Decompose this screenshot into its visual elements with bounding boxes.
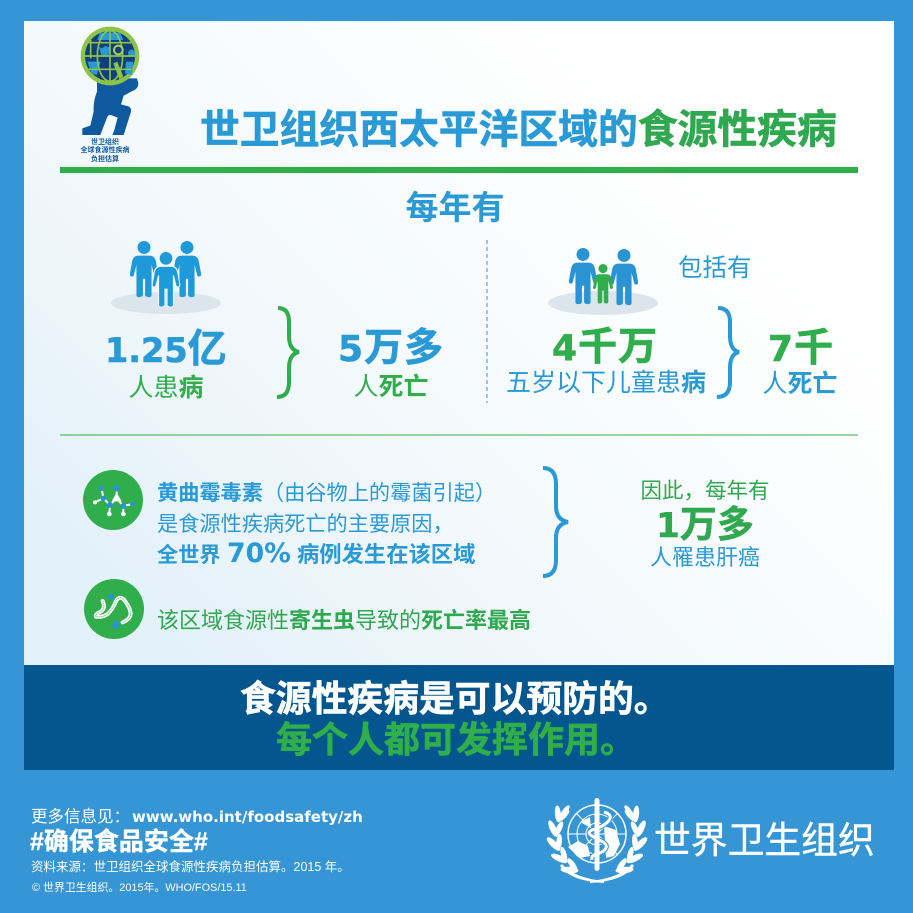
footer text: 资料来源：世卫组织全球食源性疾病负担估算。2015 年。 — [31, 859, 350, 874]
text: aflatoxin: 病例发生在该区域 — [297, 542, 475, 567]
text: aflatoxin — [157, 481, 496, 569]
panel: children — [506, 248, 838, 398]
text: liver cancer: 因此，每年有 — [640, 479, 770, 503]
label: deaths: 人死亡 — [353, 373, 429, 401]
brace: large blue — [543, 468, 568, 576]
logo caption — [80, 137, 130, 163]
stat: 50 thousand: 5万多 — [338, 327, 444, 370]
text: aflatoxin: 黄曲霉毒素（由谷物上的霉菌引起） — [157, 481, 496, 505]
heading: every year: 每年有 — [406, 189, 504, 226]
icon: global burden logo — [80, 27, 139, 163]
footer text — [30, 807, 363, 894]
icon: family with child — [548, 248, 658, 315]
panel: aflatoxin — [83, 468, 770, 576]
logo caption: 负担估算 — [91, 154, 119, 163]
logo caption: 全球食源性疾病 — [80, 145, 130, 154]
label: child deaths: 人死亡 — [762, 370, 838, 398]
brace: blue — [717, 308, 739, 397]
brace: green — [277, 308, 299, 397]
icon: group of three people — [111, 241, 221, 314]
stat: 125 million: 1.25亿 — [105, 328, 227, 371]
panel: all people — [105, 241, 444, 402]
footer text: © 世界卫生组织。2015年。WHO/FOS/15.11 — [32, 880, 247, 894]
footer text: #确保食品安全# — [30, 827, 208, 856]
text: liver cancer — [640, 479, 770, 570]
banner line 1: 食源性疾病是可以预防的。 — [240, 679, 670, 719]
panel: prevention banner — [24, 665, 894, 770]
icon: parasite worm — [84, 579, 144, 639]
text: aflatoxin: 是食源性疾病死亡的主要原因， — [157, 512, 454, 536]
logo caption: 世卫组织 — [91, 137, 119, 146]
text: liver cancer: 1万多 — [656, 504, 754, 546]
stat: 7 thousand: 7千 — [768, 327, 834, 370]
icon: molecule — [83, 470, 143, 530]
panel: main white panel — [24, 21, 894, 665]
title: 世卫组织西太平洋区域的食源性疾病 — [200, 108, 837, 152]
banner line 2: 每个人都可发挥作用。 — [276, 719, 636, 760]
icon: WHO emblem — [545, 798, 649, 883]
text: parasite mortality: 该区域食源性寄生虫导致的死亡率最高 — [157, 608, 531, 633]
text: aflatoxin: 全世界 — [157, 544, 221, 567]
label: children under five ill: 五岁以下儿童患病 — [506, 369, 706, 397]
WHO name: 世界卫生组织 — [654, 820, 875, 861]
title rule — [60, 167, 858, 173]
panel: parasites — [84, 579, 531, 639]
label: including: 包括有 — [678, 254, 752, 282]
text: liver cancer: 人罹患肝癌 — [650, 545, 760, 570]
label: people ill: 人患病 — [128, 374, 204, 402]
footer text: www.who.int/foodsafety/zh — [132, 808, 363, 826]
stat: 40 million: 4千万 — [552, 326, 658, 369]
footer text: 更多信息见： — [31, 808, 130, 826]
text: aflatoxin: 70% — [227, 538, 291, 569]
